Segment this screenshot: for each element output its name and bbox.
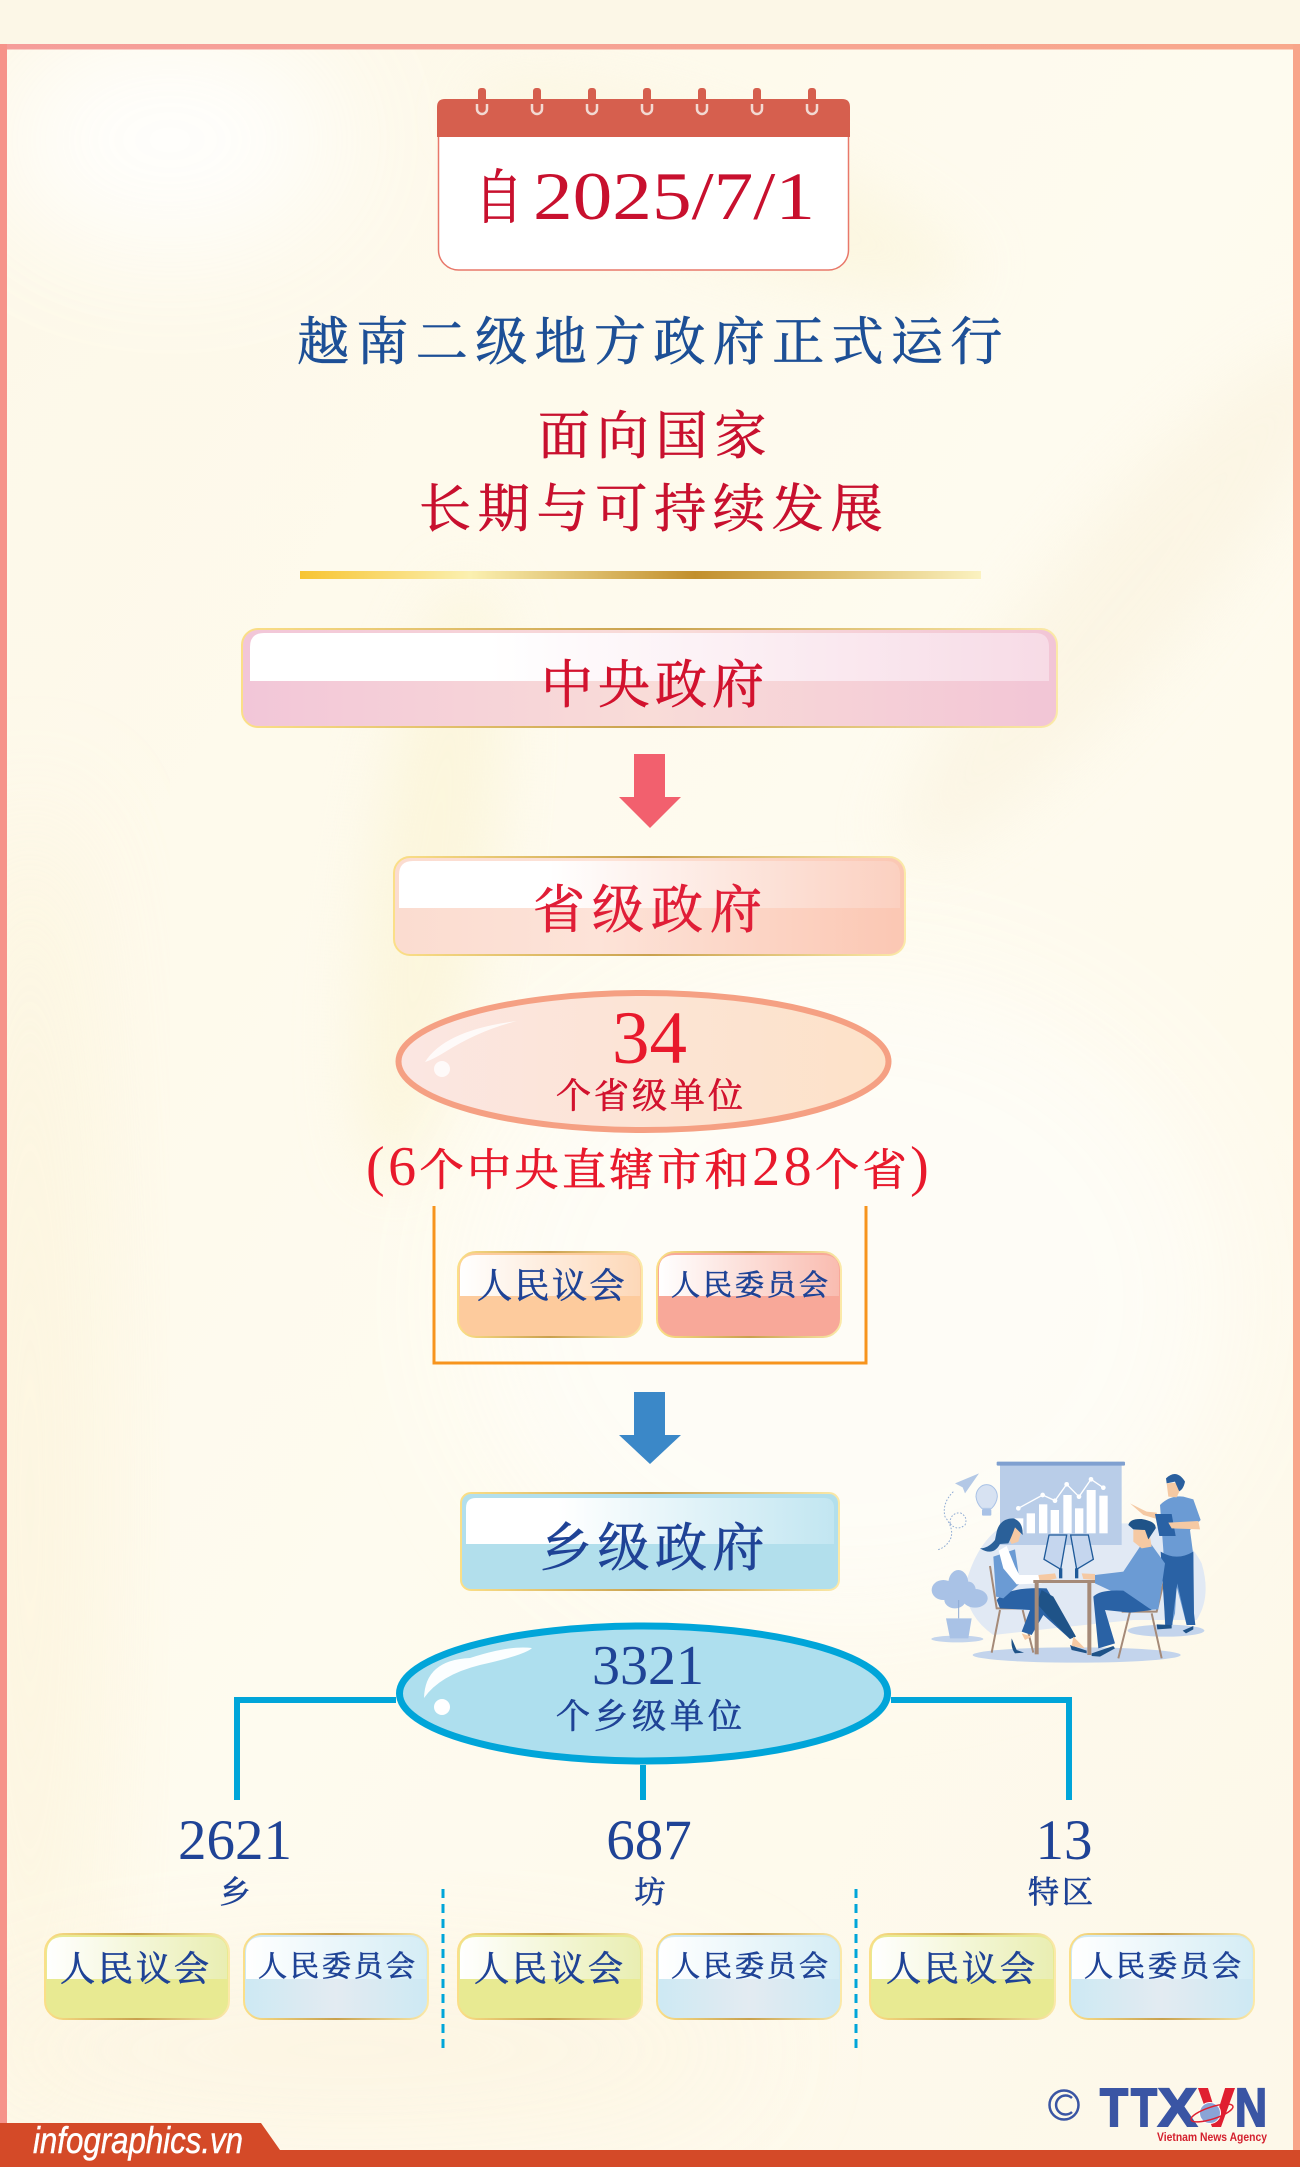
oval gloss: [425, 1021, 517, 1062]
gold divider: [300, 571, 981, 579]
logo: TTXVN: V: [1199, 2078, 1234, 2138]
stat: 2621 communes: [178, 1809, 292, 1910]
stat: 13 special zones: 13: [1036, 1809, 1092, 1872]
box: ward people's committee: [657, 1934, 841, 2019]
logo: TTXVN: X: [1158, 2078, 1197, 2138]
box: ward people's council: [458, 1934, 642, 2019]
logo: TTXVN: [1100, 2078, 1267, 2144]
oval: 34 provincial units: 34: [612, 997, 687, 1080]
calendar rings: [477, 88, 817, 114]
illustration: team at computers: [931, 1462, 1206, 1663]
box: special zone people's committee: [1070, 1934, 1254, 2019]
oval gloss: [424, 1647, 532, 1698]
calendar with date: [437, 88, 850, 270]
oval: 3321 commune units: 3321: [592, 1635, 704, 1697]
box: provincial people's committee: [657, 1252, 841, 1337]
box: central government: [242, 629, 1057, 727]
box: special zone people's committee: 人民委员会: [1084, 1950, 1244, 1983]
box: ward people's council: 人民议会: [474, 1950, 626, 1989]
copyright symbol: [1050, 2090, 1078, 2120]
box: commune people's council: 人民议会: [60, 1950, 212, 1989]
box: central government: 中央政府: [541, 658, 769, 715]
oval: 3321 commune units: 个乡级单位: [556, 1698, 746, 1736]
logo: TTXVN: Vietnam News Agency: [1157, 2130, 1267, 2144]
box: commune people's council: [45, 1934, 229, 2019]
stat: 687 wards: 687: [606, 1809, 692, 1872]
bracket: provincial organs: [434, 1206, 866, 1363]
footer bar with site name: [0, 2120, 1300, 2167]
box: provincial government: 省级政府: [533, 883, 769, 940]
title line: blue: 越南二级地方政府正式运行: [297, 315, 1010, 372]
box: ward people's committee: 人民委员会: [671, 1950, 831, 1983]
connector: centre branch: [640, 1765, 646, 1800]
text: 6 cities and 28 provinces: (6个中央直辖市和28个省): [366, 1136, 932, 1198]
subtitle line 2: red: 长期与可持续发展: [419, 482, 889, 539]
box: commune government: [461, 1493, 839, 1590]
date digits: 2025/7/1: [533, 158, 815, 234]
stat: 13 special zones: 特区: [1028, 1875, 1096, 1910]
stat: 687 wards: 坊: [634, 1875, 666, 1910]
logo: TTXVN: N: [1235, 2078, 1267, 2138]
connector: left branch: [237, 1700, 396, 1800]
dashed divider left: [442, 1889, 444, 2051]
arrow: red down: [619, 754, 681, 828]
stat: 687 wards: [606, 1809, 692, 1910]
box: commune government: 乡级政府: [540, 1521, 770, 1578]
box: provincial people's committee: 人民委员会: [671, 1269, 831, 1302]
oval: 34 provincial units: [398, 993, 888, 1130]
stat: 2621 communes: 2621: [178, 1809, 292, 1872]
oval: 34 provincial units: 个省级单位: [556, 1077, 746, 1116]
logo: TTXVN: T: [1100, 2078, 1128, 2138]
connector: right branch: [891, 1700, 1069, 1800]
box: provincial government: [394, 857, 905, 955]
box: provincial people's council: 人民议会: [477, 1267, 627, 1306]
dashed divider right: [854, 1889, 858, 2051]
stat: 13 special zones: [1028, 1809, 1096, 1910]
box: special zone people's council: 人民议会: [886, 1950, 1038, 1989]
box: provincial people's council: [458, 1252, 642, 1337]
box: commune people's committee: 人民委员会: [258, 1950, 418, 1983]
subtitle line 1: red: 面向国家: [538, 409, 773, 466]
box: commune people's committee: [244, 1934, 428, 2019]
logo: TTXVN: T: [1131, 2078, 1157, 2138]
date prefix: 自: [475, 165, 523, 231]
box: special zone people's council: [870, 1934, 1055, 2019]
arrow: blue down: [619, 1392, 681, 1464]
oval: 3321 commune units: [400, 1626, 888, 1761]
stat: 2621 communes: 乡: [220, 1875, 250, 1910]
footer bar with site name: infographics.vn: [33, 2120, 243, 2161]
